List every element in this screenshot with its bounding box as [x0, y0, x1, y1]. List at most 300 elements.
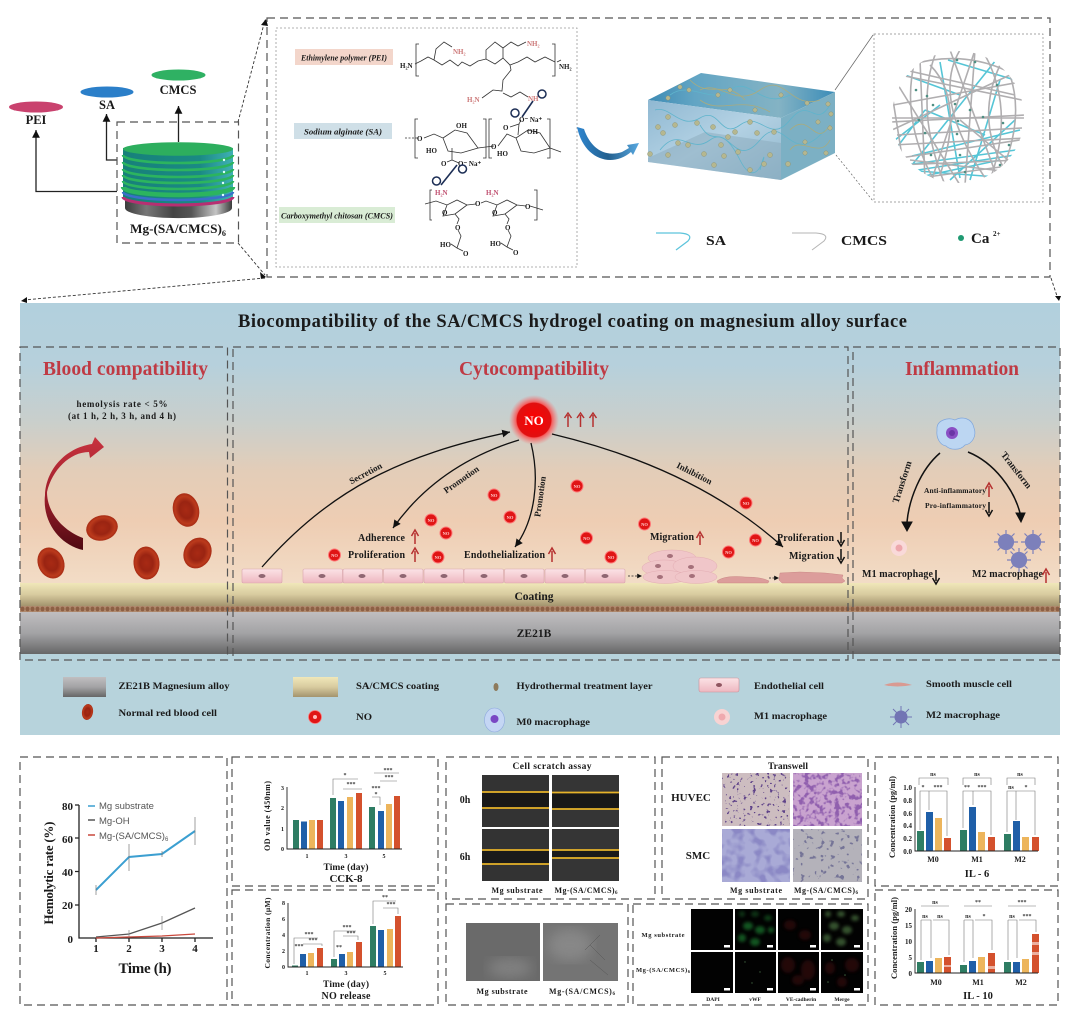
- significance brackets: [919, 772, 1035, 836]
- significance brackets: ns: [1008, 785, 1015, 791]
- icon: M2 macrophages: [994, 530, 1045, 572]
- axis labels: 0.8: [903, 797, 912, 805]
- significance brackets: ns: [974, 772, 981, 778]
- hydrothermal layer: [20, 606, 1060, 612]
- captions: Mg substrate: [476, 987, 528, 996]
- axis labels: Concentration (pg/ml): [887, 776, 897, 858]
- axis labels: 0.0: [903, 848, 912, 856]
- axis labels: Time (day): [324, 862, 368, 873]
- CMCS structure: O: [442, 209, 448, 217]
- adherence and proliferation labels: [348, 530, 418, 562]
- stack name: Mg-(SA/CMCS): [130, 221, 220, 236]
- axes: [287, 787, 402, 849]
- CMCS label box: Carboxymethyl chitosan (CMCS): [281, 210, 393, 220]
- free NO molecules: NO: [725, 550, 732, 555]
- series: Mg substrate: [96, 817, 195, 895]
- PEI structure: NH₂: [453, 48, 466, 56]
- axis labels: 3: [281, 786, 284, 792]
- legend: endothelial cell: Endothelial cell: [754, 681, 825, 691]
- arrow: transform to M2: Transform: [998, 451, 1033, 491]
- significance brackets: *: [922, 785, 924, 791]
- significance brackets: [294, 895, 398, 964]
- legend: M2 macrophage text: M2 macrophage: [926, 710, 1000, 720]
- legend: endothelial cell: [699, 678, 825, 692]
- tick labels: 3: [159, 943, 165, 955]
- axis labels: 5: [908, 954, 912, 962]
- NO glow source: NO: [524, 413, 544, 428]
- free NO molecules: NO: [331, 553, 338, 558]
- captions: [492, 886, 618, 896]
- axis labels: 15: [905, 922, 912, 930]
- panel: NO release chart: [232, 890, 438, 1005]
- significance brackets: ***: [346, 931, 356, 937]
- legend: ZE21B: ZE21B Magnesium alloy: [118, 681, 230, 691]
- bars: [293, 793, 400, 849]
- legend: calcium dot: 2+: [993, 230, 1000, 238]
- chart legend: Mg substrate: [99, 801, 154, 812]
- row labels: SMC: [686, 850, 710, 862]
- section: blood compatibility: [32, 359, 217, 583]
- arrow: secretion: [262, 432, 510, 567]
- significance brackets: ***: [384, 768, 392, 774]
- layer names: [515, 591, 554, 640]
- significance brackets: ***: [294, 944, 304, 950]
- axis labels: NO release: [322, 991, 371, 1002]
- channel labels: vWF: [749, 997, 761, 1003]
- frame: [446, 757, 655, 899]
- PEI layer label: PEI: [26, 113, 47, 127]
- SA layer label: [80, 86, 134, 112]
- tick labels: 1: [93, 943, 99, 955]
- arrow: transform to M1: [892, 453, 940, 531]
- axis labels: 0.6: [903, 810, 912, 818]
- series: Mg-OH: [96, 908, 195, 938]
- axis labels: 0: [908, 970, 912, 978]
- legend: NO: NO: [356, 712, 372, 722]
- SA structure: O: [417, 135, 423, 143]
- panel: transwell: [662, 757, 868, 899]
- significance brackets: ns: [922, 914, 929, 920]
- SA label box: [294, 123, 392, 139]
- anti-inflammatory label: Anti-inflammatory: [924, 486, 986, 495]
- axis labels: IL - 10: [963, 991, 993, 1002]
- arrow: secretion: Secretion: [347, 461, 384, 486]
- axes: [915, 787, 1038, 851]
- significance brackets: [921, 900, 1036, 962]
- axis labels: Concentration (pg/ml): [889, 897, 899, 979]
- SA structure: O⁻ Na⁺: [519, 116, 542, 124]
- bars: [917, 807, 1039, 851]
- free NO molecules: NO: [583, 536, 590, 541]
- coating layer: [20, 583, 1060, 606]
- network of SA and CMCS: [890, 50, 1026, 185]
- channel labels: DAPI: [706, 997, 720, 1003]
- dotted migration arrows: [628, 576, 779, 578]
- ionic bond SA to CMCS: [432, 165, 466, 185]
- network inset frame: [874, 34, 1043, 202]
- axis labels: 3: [344, 971, 348, 977]
- axis labels: 5: [382, 854, 386, 860]
- significance brackets: ns: [1017, 772, 1024, 778]
- heading: Cytocompatibility: [459, 359, 609, 380]
- scratch micrographs: [482, 775, 619, 881]
- NO glow source: [509, 395, 559, 445]
- SA layer label: SA: [99, 98, 115, 112]
- CMCS structure: O: [475, 200, 481, 208]
- axis labels: 2: [282, 949, 285, 955]
- CMCS structure: H₂N: [435, 189, 448, 197]
- legend: CMCS curve: [792, 233, 887, 250]
- arrow: promotion to endothelialization: [515, 443, 548, 547]
- magnesium alloy layer: [20, 612, 1060, 654]
- legend: CMCS curve: CMCS: [841, 234, 887, 249]
- free NO molecules: NO: [443, 531, 450, 536]
- frame: [633, 904, 868, 1005]
- SA structure: OH: [527, 128, 538, 136]
- axis labels: Time (day): [323, 979, 369, 990]
- panel: biocompatibility: [20, 303, 1060, 735]
- zoom lines to network: [835, 35, 873, 201]
- migration up label: [650, 532, 704, 545]
- dashed section frames: [20, 347, 1060, 660]
- title: Cell scratch assay: [512, 762, 592, 772]
- axis labels: 0: [282, 965, 285, 971]
- significance brackets: *: [982, 914, 986, 920]
- three up arrows: [564, 413, 596, 427]
- captions: Mg substrate: [492, 886, 543, 895]
- frame: [20, 757, 227, 1005]
- icon: M1 macrophage: [891, 540, 907, 556]
- tick labels: 80: [62, 801, 74, 813]
- axis labels: 20: [905, 906, 912, 914]
- PEI structure: [400, 40, 572, 104]
- smooth muscle cells: [717, 572, 845, 583]
- axis labels: M0: [927, 855, 939, 864]
- axis labels: 1.0: [903, 784, 912, 792]
- adherence and proliferation labels: Proliferation: [348, 550, 405, 561]
- legend: coating: SA/CMCS coating: [356, 681, 440, 691]
- significance brackets: ***: [386, 902, 396, 908]
- axis labels: OD value (450nm): [263, 781, 272, 851]
- axis titles: Hemolytic rate (%): [41, 822, 56, 924]
- significance brackets: ns: [932, 900, 939, 906]
- layer stack diagram: [9, 70, 238, 243]
- legend: hydrothermal layer: Hydrothermal treatment layer: [516, 681, 652, 691]
- axis labels: M1: [972, 978, 984, 987]
- legend: calcium dot: [958, 230, 1000, 247]
- SA structure: O: [441, 160, 447, 168]
- axis labels: [889, 897, 1027, 1002]
- panel: immunofluorescence: [633, 904, 868, 1005]
- legend: red blood cell: Normal red blood cell: [118, 708, 218, 718]
- SA structure: O: [503, 124, 509, 132]
- axis labels: IL - 6: [965, 869, 989, 880]
- significance brackets: *: [1024, 785, 1028, 791]
- free NO molecules: [328, 480, 762, 563]
- anti-inflammatory label: [924, 483, 992, 497]
- significance brackets: ***: [384, 775, 394, 781]
- legend: M0 macrophage: [484, 708, 590, 732]
- significance brackets: ns: [937, 914, 944, 920]
- legend: M2 macrophage: [890, 706, 912, 728]
- panel: IL-6 chart: [875, 757, 1058, 886]
- chart legend: Mg-(SA/CMCS): [99, 831, 165, 842]
- significance brackets: ***: [308, 938, 318, 944]
- legend: M1 macrophage: [714, 709, 827, 725]
- CMCS structure: O: [505, 224, 511, 232]
- panel: hemolytic rate chart: [20, 757, 227, 1005]
- row labels: 0h: [460, 795, 471, 806]
- series: Mg-(SA/CMCS)6: [96, 934, 195, 938]
- row labels: [636, 932, 691, 974]
- icon: curved red arrow: [45, 437, 104, 550]
- SA structure: O⁻ Na⁺: [458, 160, 481, 168]
- axis labels: CCK-8: [330, 873, 363, 885]
- captions: [476, 987, 616, 997]
- SA label box: Sodium alginate (SA): [304, 126, 382, 136]
- stack name: 6: [222, 229, 226, 238]
- dashed stack frame: [117, 122, 238, 243]
- hemolysis note: [68, 399, 176, 421]
- PEI layer label: [9, 102, 63, 127]
- CMCS structure: O: [525, 203, 531, 211]
- CMCS layer label: [152, 70, 206, 97]
- axis labels: 3: [344, 854, 348, 860]
- proliferation and migration down labels: [777, 532, 844, 563]
- PEI structure: NH₂: [527, 40, 540, 48]
- legend: SA curve: [656, 233, 727, 250]
- free NO molecules: NO: [435, 555, 442, 560]
- PEI structure: NH₂: [559, 63, 572, 71]
- captions: Mg-(SA/CMCS): [794, 886, 855, 895]
- axis labels: Concentration (μM): [263, 897, 272, 968]
- hemolysis note: hemolysis rate < 5%: [76, 399, 168, 409]
- significance brackets: ***: [342, 925, 352, 931]
- arrows from stack to layers: [36, 106, 178, 192]
- axis labels: 10: [905, 938, 912, 946]
- legend: calcium dot: Ca: [971, 231, 990, 247]
- panel: cell scratch assay: [446, 757, 655, 899]
- axis labels: [263, 781, 386, 885]
- CMCS label box: [279, 207, 395, 223]
- tick labels: [62, 801, 198, 955]
- panel: surface photographs: [446, 904, 628, 1005]
- CMCS structure: HO: [490, 240, 501, 248]
- legend: ZE21B: [63, 677, 230, 697]
- significance brackets: ***: [304, 932, 314, 938]
- axis labels: 4: [282, 933, 285, 939]
- SA structure: [405, 116, 561, 168]
- arrow: transform to M2: [968, 451, 1033, 522]
- axis labels: M0: [930, 978, 942, 987]
- tick labels: 0: [68, 934, 74, 946]
- significance brackets: ***: [934, 785, 942, 791]
- significance brackets: ns: [930, 772, 937, 778]
- significance brackets: ***: [346, 782, 356, 788]
- free NO molecules: NO: [507, 515, 514, 520]
- captions: [730, 886, 858, 896]
- channel labels: VE-cadherin: [786, 997, 816, 1003]
- tick labels: 4: [192, 943, 198, 955]
- axis labels: 1: [306, 971, 308, 977]
- arrow: promotion to adherence: [393, 440, 519, 528]
- legend: NO: [308, 710, 372, 724]
- captions: 6: [856, 891, 858, 896]
- PEI structure: NH: [528, 95, 539, 103]
- row labels: 6: [688, 969, 691, 974]
- endothelialization label: [464, 548, 556, 562]
- heading: Blood compatibility: [43, 359, 208, 380]
- axis labels: 0.4: [903, 822, 912, 830]
- significance brackets: ***: [1022, 914, 1032, 920]
- M1 macrophage label: M1 macrophage: [862, 569, 934, 580]
- chart legend: 6: [165, 837, 169, 843]
- PEI label box: Ethimylene polymer (PEI): [300, 54, 387, 62]
- free NO molecules: NO: [641, 522, 648, 527]
- significance brackets: **: [336, 945, 342, 951]
- proliferation and migration down labels: Proliferation: [777, 533, 834, 544]
- layer names: ZE21B: [517, 628, 552, 640]
- row labels: 6h: [460, 852, 471, 863]
- PEI label box: [295, 49, 393, 65]
- captions: Mg-(SA/CMCS): [554, 886, 615, 895]
- endothelialization label: Endothelialization: [464, 550, 545, 561]
- captions: Mg-(SA/CMCS): [549, 987, 612, 996]
- axis titles: [41, 822, 172, 977]
- arrow: promotion to adherence: Promotion: [442, 464, 481, 495]
- icon: M0 macrophage: [937, 418, 975, 449]
- free NO molecules: NO: [743, 501, 750, 506]
- icon: curved blue arrow: [577, 127, 639, 160]
- axis labels: 1: [281, 827, 284, 833]
- CMCS structure: O: [455, 224, 461, 232]
- axis labels: [887, 776, 1026, 880]
- free NO molecules: NO: [574, 484, 581, 489]
- free NO molecules: NO: [752, 538, 759, 543]
- frame: [662, 757, 868, 899]
- panel background: [20, 303, 1060, 583]
- pro-inflammatory label: [925, 501, 992, 516]
- legend: smooth muscle cell: [884, 679, 1013, 689]
- axis labels: 6: [282, 917, 285, 923]
- axis labels: 8: [282, 901, 285, 907]
- frame: [875, 757, 1058, 886]
- panel: hydrogel composition: [267, 18, 1050, 277]
- significance brackets: ***: [1018, 900, 1026, 906]
- panel: IL-10 chart: [875, 890, 1058, 1005]
- title: Transwell: [768, 762, 808, 772]
- proliferation and migration down labels: Migration: [789, 551, 834, 562]
- surface micrographs: [466, 923, 618, 981]
- zoom lines to chemistry frame: [24, 20, 1058, 300]
- row labels: Mg-(SA/CMCS): [636, 967, 687, 974]
- axis labels: M2: [1014, 855, 1026, 864]
- migrating endothelial cells: [642, 550, 717, 584]
- significance brackets: ***: [978, 785, 986, 791]
- significance brackets: *: [344, 773, 346, 779]
- migration up label: Migration: [650, 532, 694, 543]
- ionic bond PEI to SA: [511, 90, 546, 117]
- channel labels: [706, 997, 850, 1003]
- frame: [446, 904, 628, 1005]
- axis titles: Time (h): [118, 961, 172, 977]
- frame: [232, 757, 438, 886]
- legend: [63, 677, 1013, 732]
- arrow: transform to M1: Transform: [892, 460, 915, 505]
- tick labels: 60: [62, 834, 74, 846]
- section: cytocompatibility: [242, 359, 845, 584]
- frame: [232, 890, 438, 1005]
- layer names: Coating: [515, 591, 554, 603]
- inner dotted frame: [276, 28, 577, 267]
- chart legend: [88, 801, 169, 843]
- axis labels: 5: [384, 971, 386, 977]
- significance brackets: ns: [965, 914, 972, 920]
- adherence and proliferation labels: Adherence: [358, 533, 406, 544]
- axis labels: 2: [281, 806, 284, 812]
- axis labels: 0.2: [903, 835, 912, 843]
- axis labels: M2: [1015, 978, 1027, 987]
- M2 macrophage label: M2 macrophage: [972, 569, 1044, 580]
- significance brackets: **: [382, 895, 388, 901]
- bars: [292, 916, 401, 967]
- tick labels: 2: [126, 943, 132, 955]
- fluorescence micrographs: [691, 909, 863, 993]
- transwell micrographs: [722, 773, 862, 882]
- significance brackets: ns: [1009, 914, 1016, 920]
- tick labels: 20: [62, 900, 74, 912]
- legend band background: [20, 654, 1060, 735]
- tick labels: 40: [62, 867, 74, 879]
- red blood cells: [32, 490, 217, 583]
- coated cylinder: [123, 142, 233, 218]
- axis labels: [263, 897, 386, 1002]
- CMCS structure: HO: [440, 241, 451, 249]
- frame: [875, 890, 1058, 1005]
- SA structure: HO: [497, 150, 508, 158]
- axis labels: M1: [971, 855, 983, 864]
- captions: Mg substrate: [730, 886, 782, 895]
- SA structure: HO: [426, 147, 437, 155]
- significance brackets: **: [975, 900, 981, 906]
- captions: 6: [612, 992, 616, 997]
- significance brackets: ***: [372, 786, 380, 792]
- free NO molecules: NO: [608, 555, 615, 560]
- heading: Inflammation: [905, 359, 1019, 380]
- legend: red blood cell: [81, 703, 218, 721]
- free NO molecules: NO: [428, 518, 435, 523]
- Ca2+ beads: [648, 85, 833, 172]
- CMCS structure: O: [463, 250, 469, 258]
- row labels: HUVEC: [671, 792, 711, 804]
- row labels: Mg substrate: [642, 932, 685, 939]
- legend: coating: [293, 677, 440, 697]
- arrow: inhibition: [552, 434, 783, 547]
- SA structure: OH: [456, 122, 467, 130]
- pro-inflammatory label: Pro-inflammatory: [925, 501, 986, 510]
- bars: [917, 934, 1039, 973]
- CMCS structure: O: [513, 249, 519, 257]
- PEI structure: H₂N: [467, 96, 480, 104]
- captions: 6: [615, 891, 618, 896]
- axes: [75, 805, 213, 942]
- SA structure: O: [491, 143, 497, 151]
- significance brackets: [333, 768, 399, 805]
- axis labels: 1: [306, 854, 308, 860]
- CMCS layer label: CMCS: [160, 83, 196, 97]
- free NO molecules: NO: [491, 493, 498, 498]
- legend: smooth muscle cell: Smooth muscle cell: [926, 679, 1013, 689]
